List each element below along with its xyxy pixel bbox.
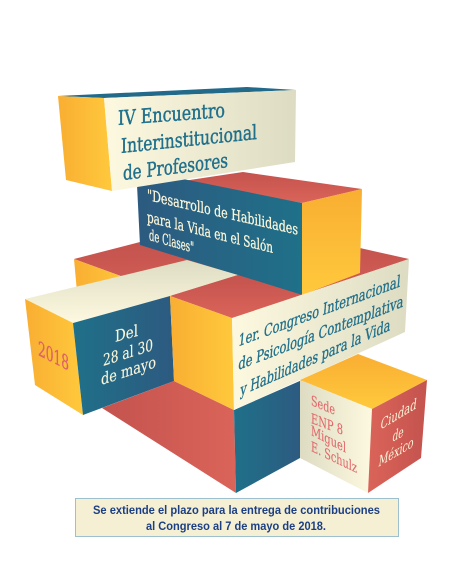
block: IV Encuentro	[58, 87, 296, 191]
callout: deadline notice: Se extiende el plazo para la entrega de contribuciones	[93, 505, 380, 517]
text: encounter title	[118, 98, 257, 185]
text: city: de	[391, 423, 405, 446]
block: Desarrollo de Habilidades	[137, 172, 362, 295]
text: venue: Sede	[311, 393, 335, 419]
block: date	[25, 260, 238, 415]
text: city	[377, 394, 418, 471]
text: venue: ENP 8	[311, 411, 343, 439]
block: venue cube	[300, 354, 427, 493]
text: encounter title: de Profesores	[123, 148, 228, 185]
text: workshop title: "Desarrollo de Habilidades	[147, 186, 298, 239]
callout: deadline notice	[76, 498, 398, 536]
text: date range: Del	[115, 321, 138, 346]
text: date range: de mayo	[101, 352, 156, 389]
text: encounter title: Interinstitucional	[121, 120, 257, 158]
text: venue	[311, 393, 357, 477]
block: congress	[170, 259, 409, 410]
text: year: 2018	[38, 337, 69, 376]
text: city: Ciudad	[380, 394, 418, 434]
block: lower red and blue base	[102, 380, 302, 493]
text: encounter title: IV Encuentro	[118, 98, 225, 130]
text: workshop title	[147, 186, 298, 257]
block: back red and yellow layer	[74, 242, 409, 318]
text: workshop title: para la Vida en el Salón	[147, 208, 273, 257]
text: city: México	[377, 432, 415, 471]
text: venue: E. Schulz	[311, 439, 357, 477]
text: venue: Miguel	[311, 422, 346, 457]
text: congress title: y Habilidades para la Vida	[239, 316, 391, 401]
text: congress title	[238, 271, 404, 401]
text: date range: 28 al 30	[103, 335, 153, 370]
text: date range	[101, 321, 156, 389]
callout: deadline notice: al Congreso al 7 de mayo de 2018.	[146, 521, 326, 533]
text: workshop title: de Clases"	[149, 226, 194, 257]
